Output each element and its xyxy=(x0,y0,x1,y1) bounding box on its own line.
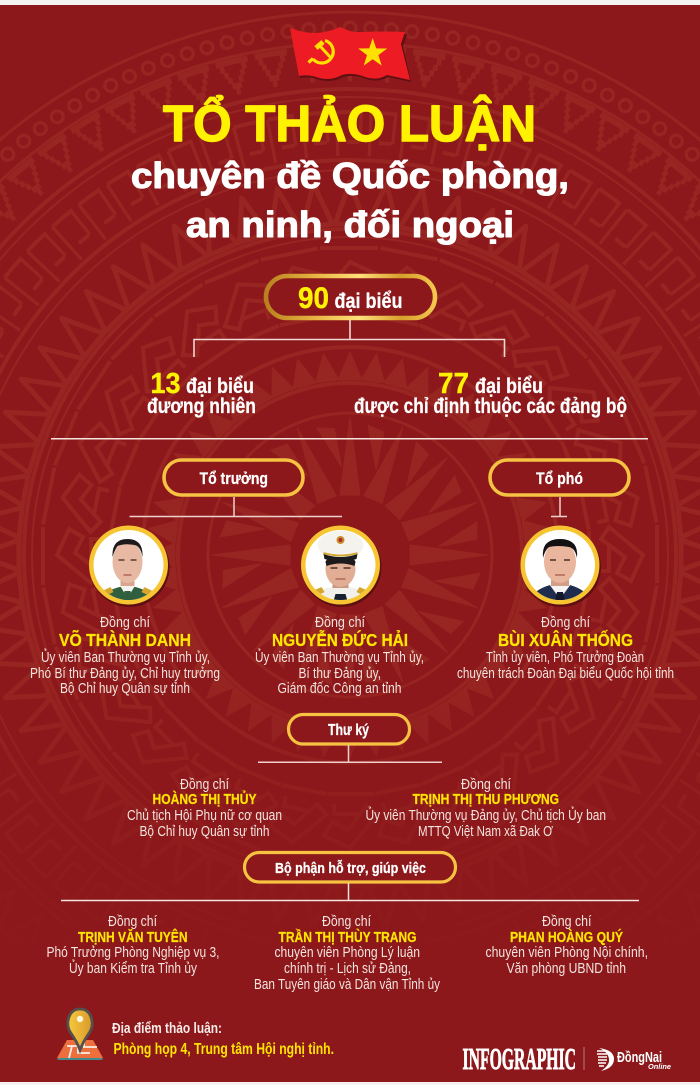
text: Võ Thành Danh: Ủy viên Ban Thường vụ Tỉnh ủy, xyxy=(41,648,210,666)
text: Bùi Xuân Thống: BÙI XUÂN THỐNG xyxy=(498,629,633,650)
logo: Đồng Nai Online: ĐồngNai xyxy=(617,1050,662,1066)
text: Trịnh Thị Thu Phương: Đồng chí xyxy=(461,777,511,793)
text: Phan Hoàng Quý: chuyên viên Phòng Nội chính, xyxy=(486,945,648,961)
location text: Phòng họp 4, Trung tâm Hội nghị tỉnh. xyxy=(114,1041,334,1058)
stat: 13 delegates: đương nhiên xyxy=(147,395,256,418)
text: Nguyễn Đức Hải: NGUYỄN ĐỨC HẢI xyxy=(272,629,408,650)
text: Hoàng Thị Thủy xyxy=(127,777,282,840)
text: Nguyễn Đức Hải: Giám đốc Công an tỉnh xyxy=(278,681,402,697)
logo: Đồng Nai Online xyxy=(597,1048,671,1071)
text: Trịnh Văn Tuyên: Phó Trưởng Phòng Nghiệp vụ 3, xyxy=(46,945,220,961)
location text: Địa điểm thảo luận: xyxy=(112,1021,222,1037)
infographic credit xyxy=(462,1041,584,1076)
portrait: Nguyễn Đức Hải xyxy=(301,526,382,607)
stat: 77 delegates: 77 xyxy=(438,368,469,400)
pill: Tổ phó: Tổ phó xyxy=(536,469,583,488)
stat: 13 delegates: 13 xyxy=(150,368,180,400)
total delegates pill: đại biểu xyxy=(334,290,402,313)
text: Nguyễn Đức Hải: Đồng chí xyxy=(315,615,365,631)
connector: Thư ký xyxy=(258,745,442,762)
stat: 13 delegates: đại biểu xyxy=(186,375,254,398)
text: Phan Hoàng Quý xyxy=(486,914,648,977)
text: Hoàng Thị Thủy: Chủ tịch Hội Phụ nữ cơ quan xyxy=(127,808,282,824)
connector: Tổ phó xyxy=(551,497,567,516)
subtitle: an ninh, đối ngoại xyxy=(186,204,514,245)
title xyxy=(131,94,569,245)
text: Võ Thành Danh: VÕ THÀNH DANH xyxy=(59,629,191,650)
text: Trịnh Thị Thu Phương: TRỊNH THỊ THU PHƯƠNG xyxy=(412,792,559,808)
text: Trần Thị Thùy Trang xyxy=(254,914,441,993)
portrait: Võ Thành Danh xyxy=(89,526,170,607)
pattern fade toward the bottom xyxy=(0,660,700,960)
location text xyxy=(112,1021,334,1058)
text: Nguyễn Đức Hải: Bí thư Đảng ủy, xyxy=(298,666,381,682)
text: Võ Thành Danh xyxy=(30,615,220,697)
pill: Tổ trưởng xyxy=(164,460,303,495)
total delegates pill: 90 xyxy=(298,282,329,315)
text: Trịnh Văn Tuyên: Ủy ban Kiểm tra Tỉnh ủy xyxy=(69,959,198,977)
text: Nguyễn Đức Hải xyxy=(255,615,424,697)
logo: Đồng Nai Online: Online xyxy=(648,1064,671,1071)
pill: Bộ phận hỗ trợ, giúp việc xyxy=(244,852,456,882)
text: Trần Thị Thùy Trang: chính trị - Lịch sử Đảng, xyxy=(284,961,411,977)
text: Trịnh Văn Tuyên: TRỊNH VĂN TUYÊN xyxy=(78,928,188,946)
pill: Tổ trưởng: Tổ trưởng xyxy=(200,469,268,488)
text: Võ Thành Danh: Bộ Chỉ huy Quân sự tỉnh xyxy=(60,681,190,697)
text: Phan Hoàng Quý: PHAN HOÀNG QUÝ xyxy=(510,928,623,946)
text: Trịnh Văn Tuyên xyxy=(46,914,220,977)
infographic credit: INFOGRAPHIC xyxy=(462,1041,576,1076)
connector: support team xyxy=(61,883,639,900)
text: Trần Thị Thùy Trang: TRẦN THỊ THÙY TRANG xyxy=(278,928,416,946)
text: Bùi Xuân Thống xyxy=(457,615,674,682)
stat: 77 delegates xyxy=(354,368,627,418)
text: Trịnh Văn Tuyên: Đồng chí xyxy=(108,914,157,930)
text: Hoàng Thị Thủy: Đồng chí xyxy=(180,777,229,793)
pill: Bộ phận hỗ trợ, giúp việc: Bộ phận hỗ trợ, giúp việc xyxy=(275,860,426,877)
portrait: Bùi Xuân Thống xyxy=(520,526,601,607)
text: Trịnh Thị Thu Phương: Ủy viên Thường vụ Đảng ủy, Chủ tịch Ủy ban xyxy=(366,806,606,824)
text: Trần Thị Thùy Trang: Ban Tuyên giáo và Dân vận Tỉnh ủy xyxy=(254,977,441,993)
text: Hoàng Thị Thủy: Bộ Chỉ huy Quân sự tỉnh xyxy=(140,824,270,840)
connector: total to groups xyxy=(194,320,504,357)
text: Phan Hoàng Quý: Đồng chí xyxy=(542,914,592,930)
title: TỔ THẢO LUẬN xyxy=(163,94,536,152)
text: Trịnh Thị Thu Phương xyxy=(366,777,606,840)
text: Trịnh Thị Thu Phương: MTTQ Việt Nam xã Đak Ơ xyxy=(418,824,553,840)
text: Hoàng Thị Thủy: HOÀNG THỊ THỦY xyxy=(152,790,257,808)
stat: 77 delegates: được chỉ định thuộc các đảng bộ xyxy=(354,395,627,418)
stat: 77 delegates: đại biểu xyxy=(475,375,543,398)
text: Phan Hoàng Quý: Văn phòng UBND tỉnh xyxy=(506,961,626,977)
text: Bùi Xuân Thống: Đồng chí xyxy=(541,615,590,631)
icon: location pin on map xyxy=(57,1009,103,1060)
text: Trần Thị Thùy Trang: Đồng chí xyxy=(322,914,371,930)
stat: 13 delegates xyxy=(147,368,256,418)
text: Võ Thành Danh: Phó Bí thư Đảng ủy, Chỉ huy trưởng xyxy=(30,666,220,682)
subtitle: chuyên đề Quốc phòng, xyxy=(131,155,569,196)
icon: party flag xyxy=(290,27,411,82)
text: Nguyễn Đức Hải: Ủy viên Ban Thường vụ Tỉnh ủy, xyxy=(255,648,424,666)
total delegates pill xyxy=(266,276,435,318)
subtitle xyxy=(131,155,569,245)
text: Bùi Xuân Thống: Tỉnh ủy viên, Phó Trưởng Đoàn xyxy=(486,650,644,666)
pill: Tổ phó xyxy=(490,460,629,495)
connector: Tổ trưởng xyxy=(130,497,342,516)
pill: Thư ký xyxy=(288,714,410,744)
text: Trần Thị Thùy Trang: chuyên viên Phòng Lý luận xyxy=(274,945,420,961)
bronze drum background pattern xyxy=(0,10,700,764)
pill: Thư ký: Thư ký xyxy=(328,722,369,739)
text: Võ Thành Danh: Đồng chí xyxy=(100,615,150,631)
